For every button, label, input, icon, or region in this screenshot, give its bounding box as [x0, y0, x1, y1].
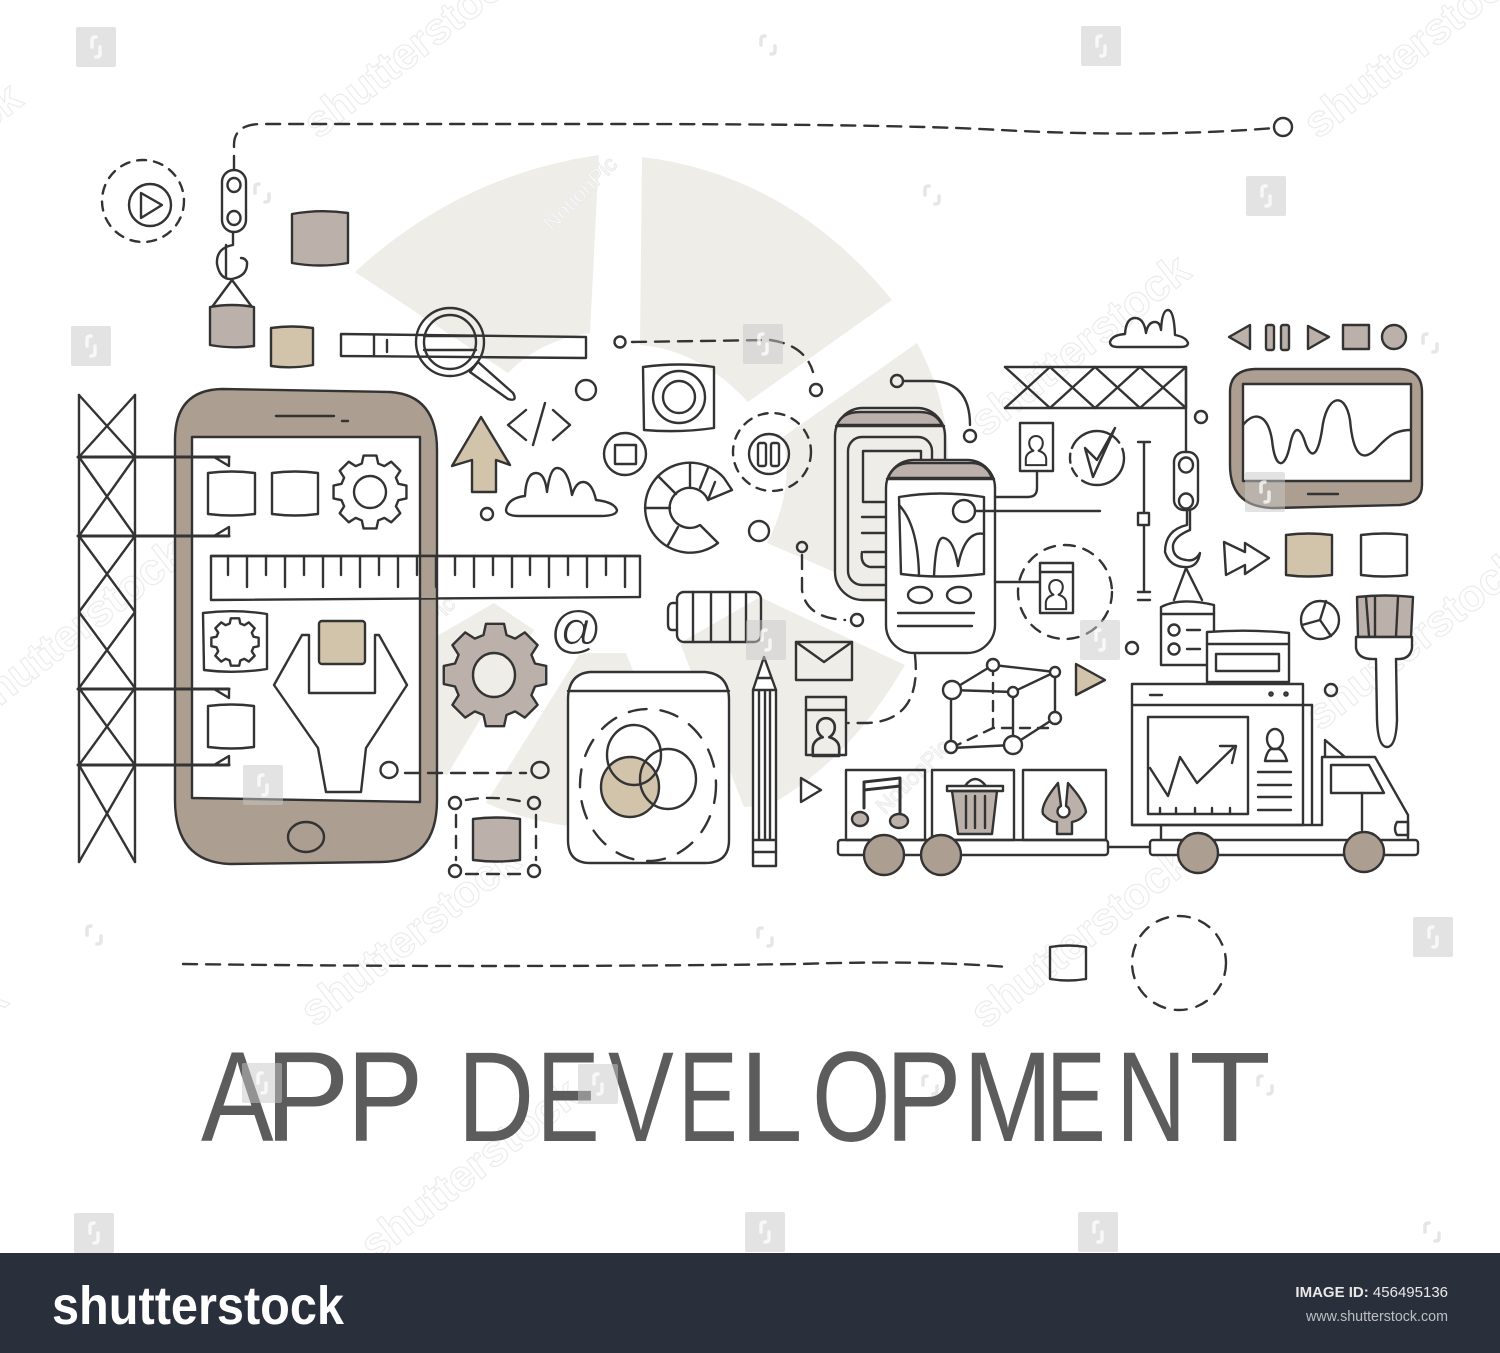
- contact card with link: [995, 423, 1053, 497]
- pie icon: [1301, 601, 1339, 639]
- title: E: [678, 1026, 738, 1169]
- truss beam: [1005, 367, 1186, 408]
- crane hook holding box: [210, 170, 254, 347]
- tan block: [271, 326, 313, 367]
- pencil: [753, 657, 776, 866]
- media controls: [1229, 325, 1406, 350]
- icon: dashed check circle: [1070, 428, 1124, 485]
- footer logo: shutterstock: [52, 1276, 345, 1336]
- cube: [943, 659, 1061, 754]
- small square bottom: [1050, 946, 1086, 980]
- dashed connector centre: [797, 542, 863, 626]
- watermark text: shutterstock: [961, 836, 1200, 1038]
- watermark text: shutterstock: [961, 244, 1200, 446]
- title: T: [1189, 1025, 1271, 1168]
- curved connector: [891, 375, 976, 442]
- image id: IMAGE ID: 456495136: [1295, 1284, 1448, 1301]
- fast forward icon: [1224, 542, 1269, 575]
- icon: small gear card: [203, 611, 267, 672]
- background pie sectors: [355, 155, 948, 828]
- color wheel chart: [645, 463, 732, 553]
- tan square right: [1286, 534, 1332, 576]
- ruler: [211, 556, 640, 600]
- phone body: [175, 389, 437, 864]
- cloud right: [1110, 310, 1188, 347]
- icon: pause in dashed circle: [733, 413, 811, 491]
- truck: [1108, 684, 1418, 873]
- front phone screen: [886, 460, 995, 653]
- title: N: [1116, 1026, 1186, 1169]
- phone square: [208, 704, 254, 748]
- footer bar: [0, 1253, 1500, 1353]
- website: www.shutterstock.com: [1305, 1308, 1448, 1325]
- window box: [1207, 631, 1289, 682]
- dashed link from phone: [380, 762, 548, 778]
- title: P: [346, 1025, 423, 1168]
- small play triangle: [801, 778, 821, 802]
- mauve block: [292, 211, 348, 266]
- tan play triangle: [1076, 664, 1105, 695]
- battery: [668, 592, 761, 642]
- dashed link to contact: [806, 655, 916, 756]
- icon: play in dashed circle: [102, 160, 184, 242]
- watermark text: shutterstock: [291, 834, 530, 1036]
- line from phone image: [975, 510, 1100, 512]
- title: P: [264, 1026, 350, 1169]
- bottom dashed connector: [183, 963, 1008, 967]
- title: E: [1046, 1026, 1106, 1169]
- dashed circle bottom: [1132, 916, 1226, 1010]
- scaffold arms: [78, 457, 229, 765]
- title: D: [458, 1026, 534, 1168]
- title: E: [536, 1025, 600, 1168]
- selection box with block: [449, 797, 540, 877]
- trailer with boxes: [838, 770, 1108, 875]
- checklist box: [1161, 601, 1214, 665]
- tower scaffold: [79, 395, 135, 862]
- crane hook right: [1165, 408, 1202, 600]
- slider: [1138, 442, 1150, 600]
- watermark text: NotionPic: [376, 591, 460, 676]
- title: L: [740, 1025, 803, 1169]
- icon: large gear: [444, 624, 546, 726]
- envelope: [796, 642, 852, 680]
- watermark text: shutterstock: [351, 1068, 590, 1270]
- title: M: [963, 1026, 1053, 1169]
- watermark text: NotionPic: [871, 734, 955, 819]
- paint brush: [1356, 596, 1413, 747]
- cloud left: [506, 468, 617, 516]
- wrench: [274, 621, 407, 792]
- code symbol: [508, 403, 570, 445]
- watermark text: NotionPic: [538, 151, 622, 236]
- top dashed connector: [234, 118, 1292, 170]
- title: P: [885, 1025, 962, 1168]
- search bar with magnifier: [341, 308, 586, 400]
- circle dots: [481, 380, 1337, 696]
- icon: camera lens: [643, 364, 714, 431]
- title: O: [812, 1027, 891, 1169]
- contact card in dashed circle: [995, 545, 1112, 639]
- icon: gear in phone: [334, 456, 406, 528]
- icon: at sign: @: [550, 601, 602, 659]
- back phone screen: [835, 408, 945, 600]
- app card with venn diagram: [568, 672, 729, 863]
- tablet with line chart: [1230, 369, 1422, 508]
- title: V: [608, 1027, 674, 1169]
- title: A: [201, 1026, 274, 1169]
- dashed connector top-centre: [614, 336, 822, 396]
- up arrow: [452, 417, 510, 492]
- title: [201, 1025, 1271, 1169]
- white square right: [1361, 534, 1407, 576]
- icon: stop in circle: [604, 433, 646, 475]
- phone app squares: [208, 472, 318, 516]
